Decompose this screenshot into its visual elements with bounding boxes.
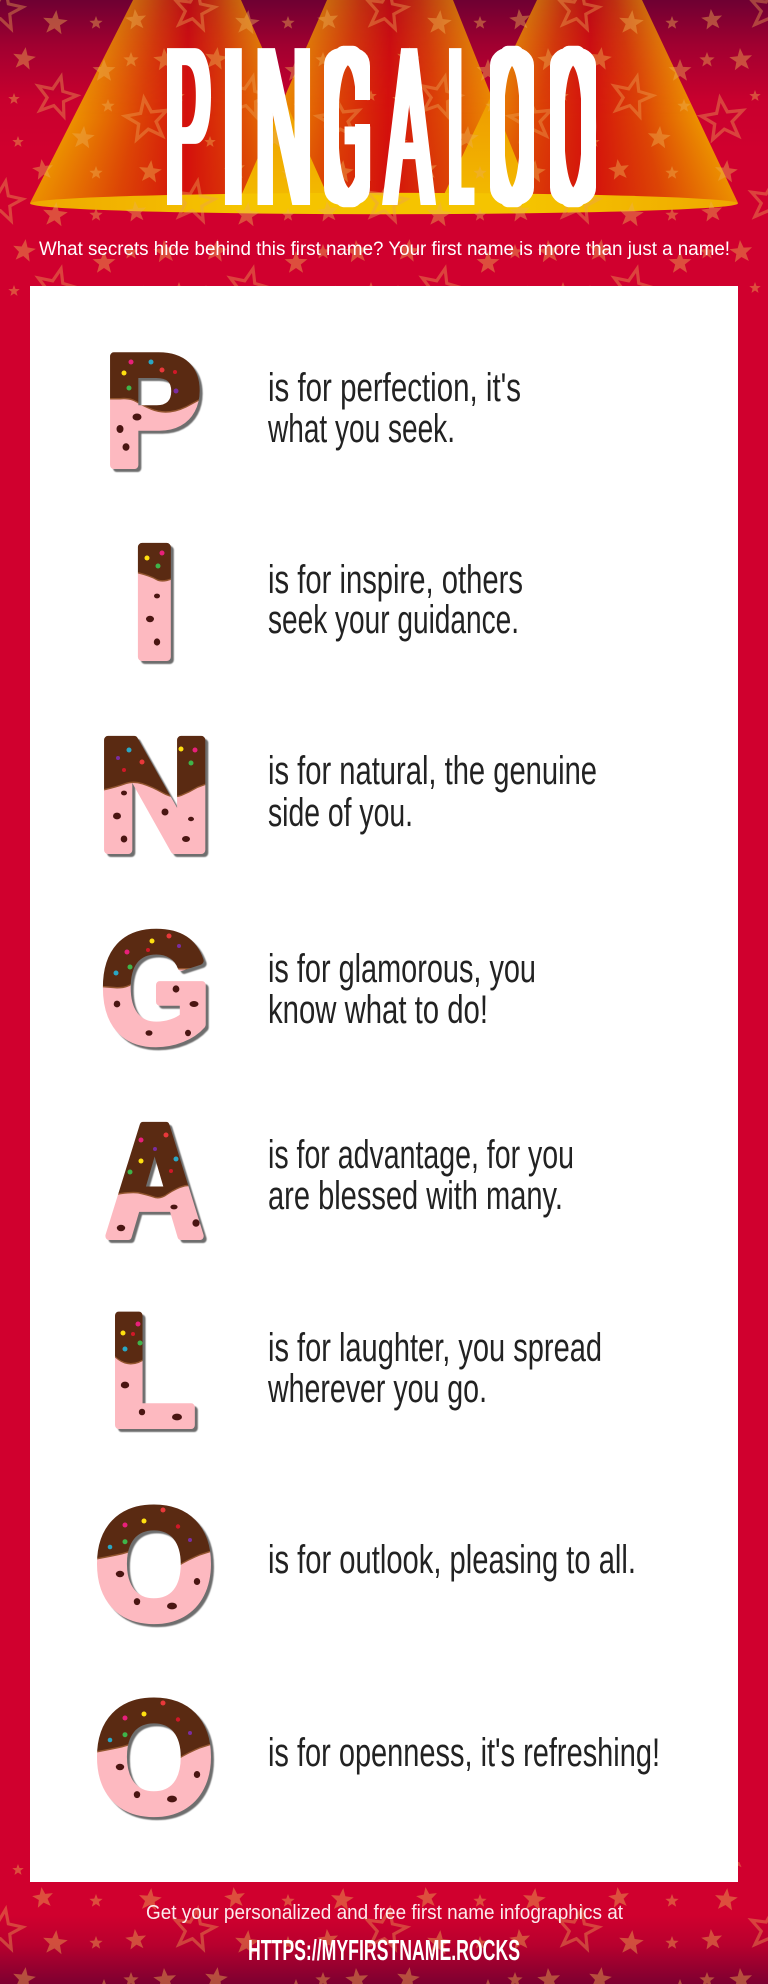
icon: cookie letter A: [105, 1122, 208, 1244]
text: G meaning: know what to do!: [268, 988, 488, 1032]
text: P meaning: what you seek.: [267, 407, 455, 451]
text: L meaning: wherever you go.: [267, 1367, 487, 1411]
text: A meaning: are blessed with many.: [268, 1174, 563, 1218]
text: O outlook meaning: is for outlook, pleasing to all.: [268, 1538, 636, 1582]
title: A: [386, 0, 432, 254]
title: I: [222, 0, 245, 254]
text: N meaning: is for natural, the genuine: [268, 749, 597, 793]
title: O: [492, 0, 532, 255]
row: letter P: [110, 352, 520, 473]
title: L: [450, 0, 471, 254]
footer star pattern: [0, 1862, 768, 1984]
icon: cookie letter I: [138, 542, 174, 665]
row: letter G: [102, 928, 534, 1051]
text: A meaning: is for advantage, for you: [268, 1133, 574, 1177]
row: letter N: [104, 736, 596, 858]
spotlight cones: [30, 0, 738, 203]
text: I meaning: [268, 558, 523, 642]
text: I meaning: seek your guidance.: [268, 598, 519, 642]
subtitle: What secrets hide behind this first name? Your first name is more than just a name!: [39, 239, 730, 260]
text: G meaning: [268, 947, 536, 1032]
text: G meaning: is for glamorous, you: [268, 947, 536, 991]
row: letter A: [105, 1122, 572, 1244]
row: letter I: [138, 542, 522, 665]
header star pattern: [0, 0, 768, 300]
icon: cookie letter N: [104, 736, 209, 858]
row: letter O (openness): [97, 1698, 658, 1821]
icon: cookie letter O: [97, 1504, 215, 1628]
icon: cookie letter G: [102, 928, 210, 1051]
text: N meaning: [268, 749, 597, 835]
icon: cookie letter O: [97, 1698, 215, 1821]
text: A meaning: [268, 1133, 574, 1218]
text: P meaning: is for perfection, it's: [268, 366, 521, 410]
spotlight floor ellipse: [30, 193, 738, 214]
icon: cookie letter L: [115, 1312, 198, 1433]
text: N meaning: side of you.: [268, 791, 413, 835]
text: P meaning: [267, 366, 521, 451]
footer url: HTTPS://MYFIRSTNAME.ROCKS: [248, 1935, 520, 1967]
white panel: [30, 286, 738, 1882]
footer call to action: Get your personalized and free first name infographics at: [146, 1902, 623, 1924]
text: I meaning: is for inspire, others: [268, 558, 523, 602]
title: N: [256, 0, 312, 255]
icon: cookie letter P: [110, 352, 204, 473]
text: L meaning: [267, 1326, 602, 1411]
title: P: [166, 0, 210, 254]
title: O: [552, 0, 594, 255]
title: [166, 0, 594, 255]
title: G: [326, 1, 370, 254]
row: letter O (outlook): [97, 1504, 634, 1628]
row: letter L: [115, 1312, 600, 1433]
text: L meaning: is for laughter, you spread: [268, 1326, 602, 1370]
